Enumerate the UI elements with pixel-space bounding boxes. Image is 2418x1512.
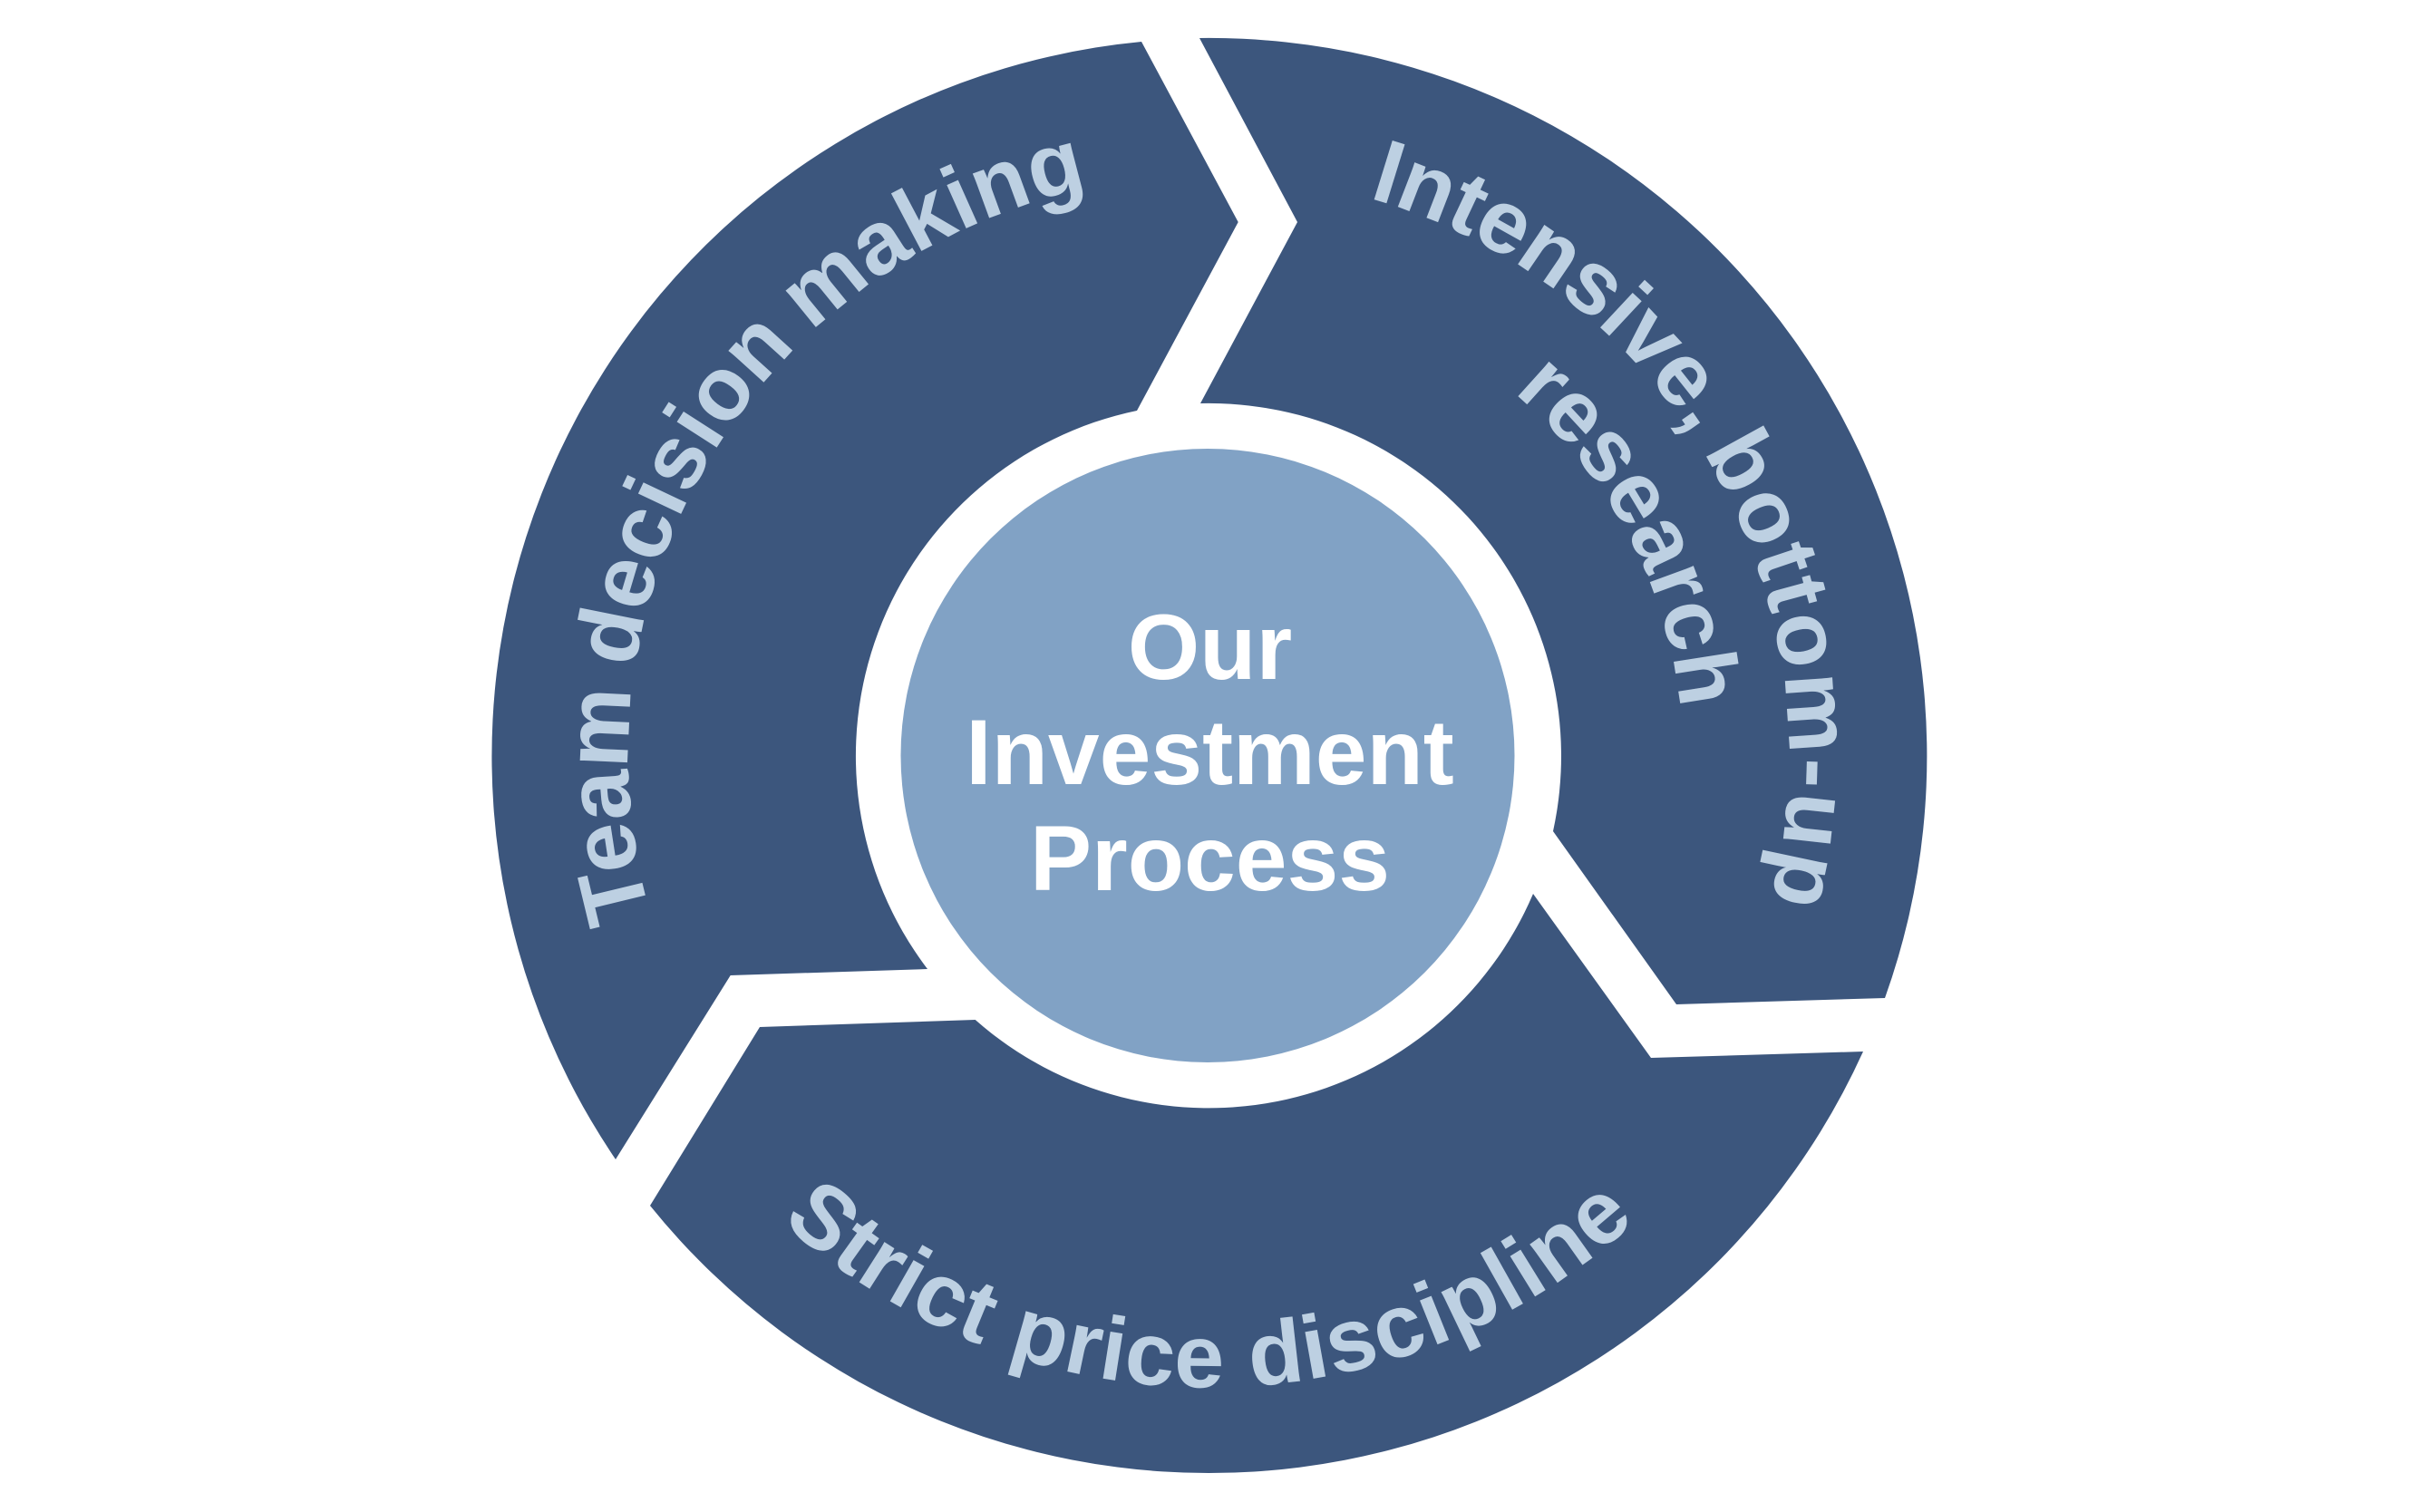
segment: strict price discipline bbox=[650, 894, 1863, 1473]
segment: team decision making: Team decision making bbox=[578, 143, 1083, 930]
center circle with title bbox=[901, 449, 1514, 1062]
segment: intensive, bottom-up research: research bbox=[1518, 361, 1739, 703]
segment: team decision making bbox=[491, 42, 1238, 1159]
segment: strict price discipline: Strict price discipline bbox=[791, 1184, 1627, 1389]
segment: intensive, bottom-up research bbox=[1199, 38, 1928, 1004]
center circle with title: Investment bbox=[966, 701, 1454, 804]
segment: intensive, bottom-up research: Intensive, bottom-up bbox=[1374, 141, 1837, 904]
center circle with title: Our bbox=[1128, 596, 1292, 699]
center circle with title: Process bbox=[1030, 807, 1390, 910]
